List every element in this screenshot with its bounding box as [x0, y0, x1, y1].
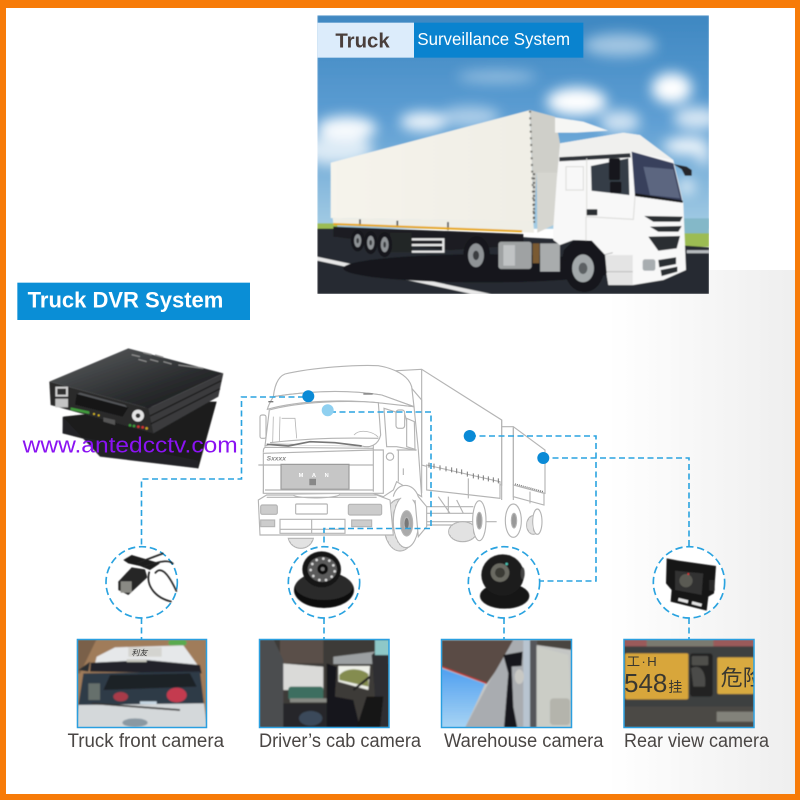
photo: rear view: 工·H — [627, 654, 658, 669]
bumper — [258, 495, 393, 535]
hero photo: white truck on road — [300, 15, 720, 294]
trailer — [331, 110, 534, 222]
caption: truck front: Truck front camera — [68, 731, 224, 752]
photo: truck front — [76, 639, 206, 727]
photo border: truck front — [78, 640, 206, 728]
caption: warehouse: Warehouse camera — [444, 731, 604, 752]
caption: driver's cab: Driver’s cab camera — [259, 731, 421, 752]
cab front body — [263, 450, 383, 493]
cab — [553, 133, 686, 285]
title banner: Surveillance System — [417, 29, 570, 49]
photo: warehouse — [442, 640, 571, 727]
photo border: driver's cab — [260, 640, 389, 728]
grille — [644, 216, 683, 222]
heading: Truck DVR System: Truck DVR System — [28, 287, 223, 312]
camera circle: truck front — [106, 547, 177, 618]
photo: rear view: 548 — [624, 668, 667, 698]
front wheel — [384, 499, 416, 551]
camera item: driver's cab — [259, 547, 421, 752]
windscreen — [265, 401, 381, 447]
photo: driver's cab — [260, 640, 388, 727]
trailer boxes — [397, 369, 502, 485]
road — [317, 229, 709, 294]
grey background block — [608, 270, 798, 796]
photo border: warehouse — [442, 640, 572, 728]
connector lines (dashed blue) — [142, 397, 689, 639]
MAN grille: Sxxxx — [267, 456, 286, 463]
trailer wheels — [351, 230, 490, 274]
camera circle: rear view — [653, 547, 725, 618]
camera circle: driver's cab — [288, 547, 360, 618]
truck line drawing — [258, 365, 545, 551]
photo: rear view — [624, 640, 765, 727]
camera item: warehouse — [441, 547, 604, 752]
heading: Truck DVR System — [17, 283, 250, 320]
MAN grille: MAN — [299, 473, 329, 479]
front wheel — [560, 241, 607, 273]
camera item: truck front — [68, 547, 224, 752]
sea and grass — [680, 218, 709, 235]
cab side — [373, 402, 422, 497]
photo: rear view: 危险 — [721, 665, 765, 690]
title banner — [317, 23, 583, 58]
camera circle: warehouse — [468, 547, 540, 618]
photo: truck front: 利友 — [131, 648, 148, 657]
wheels — [449, 522, 477, 542]
title banner: Truck — [335, 30, 390, 53]
photo border: rear view — [624, 640, 754, 728]
MAN grille — [267, 456, 349, 489]
connector dots on truck — [302, 390, 549, 464]
camera item: rear view — [624, 547, 769, 752]
photo: rear view: 挂 — [668, 679, 682, 695]
air deflector — [555, 117, 608, 133]
DVR device — [49, 348, 223, 468]
cab roof — [273, 365, 414, 407]
website watermark: www.antedcctv.com — [22, 433, 238, 458]
caption: rear view: Rear view camera — [624, 731, 769, 752]
